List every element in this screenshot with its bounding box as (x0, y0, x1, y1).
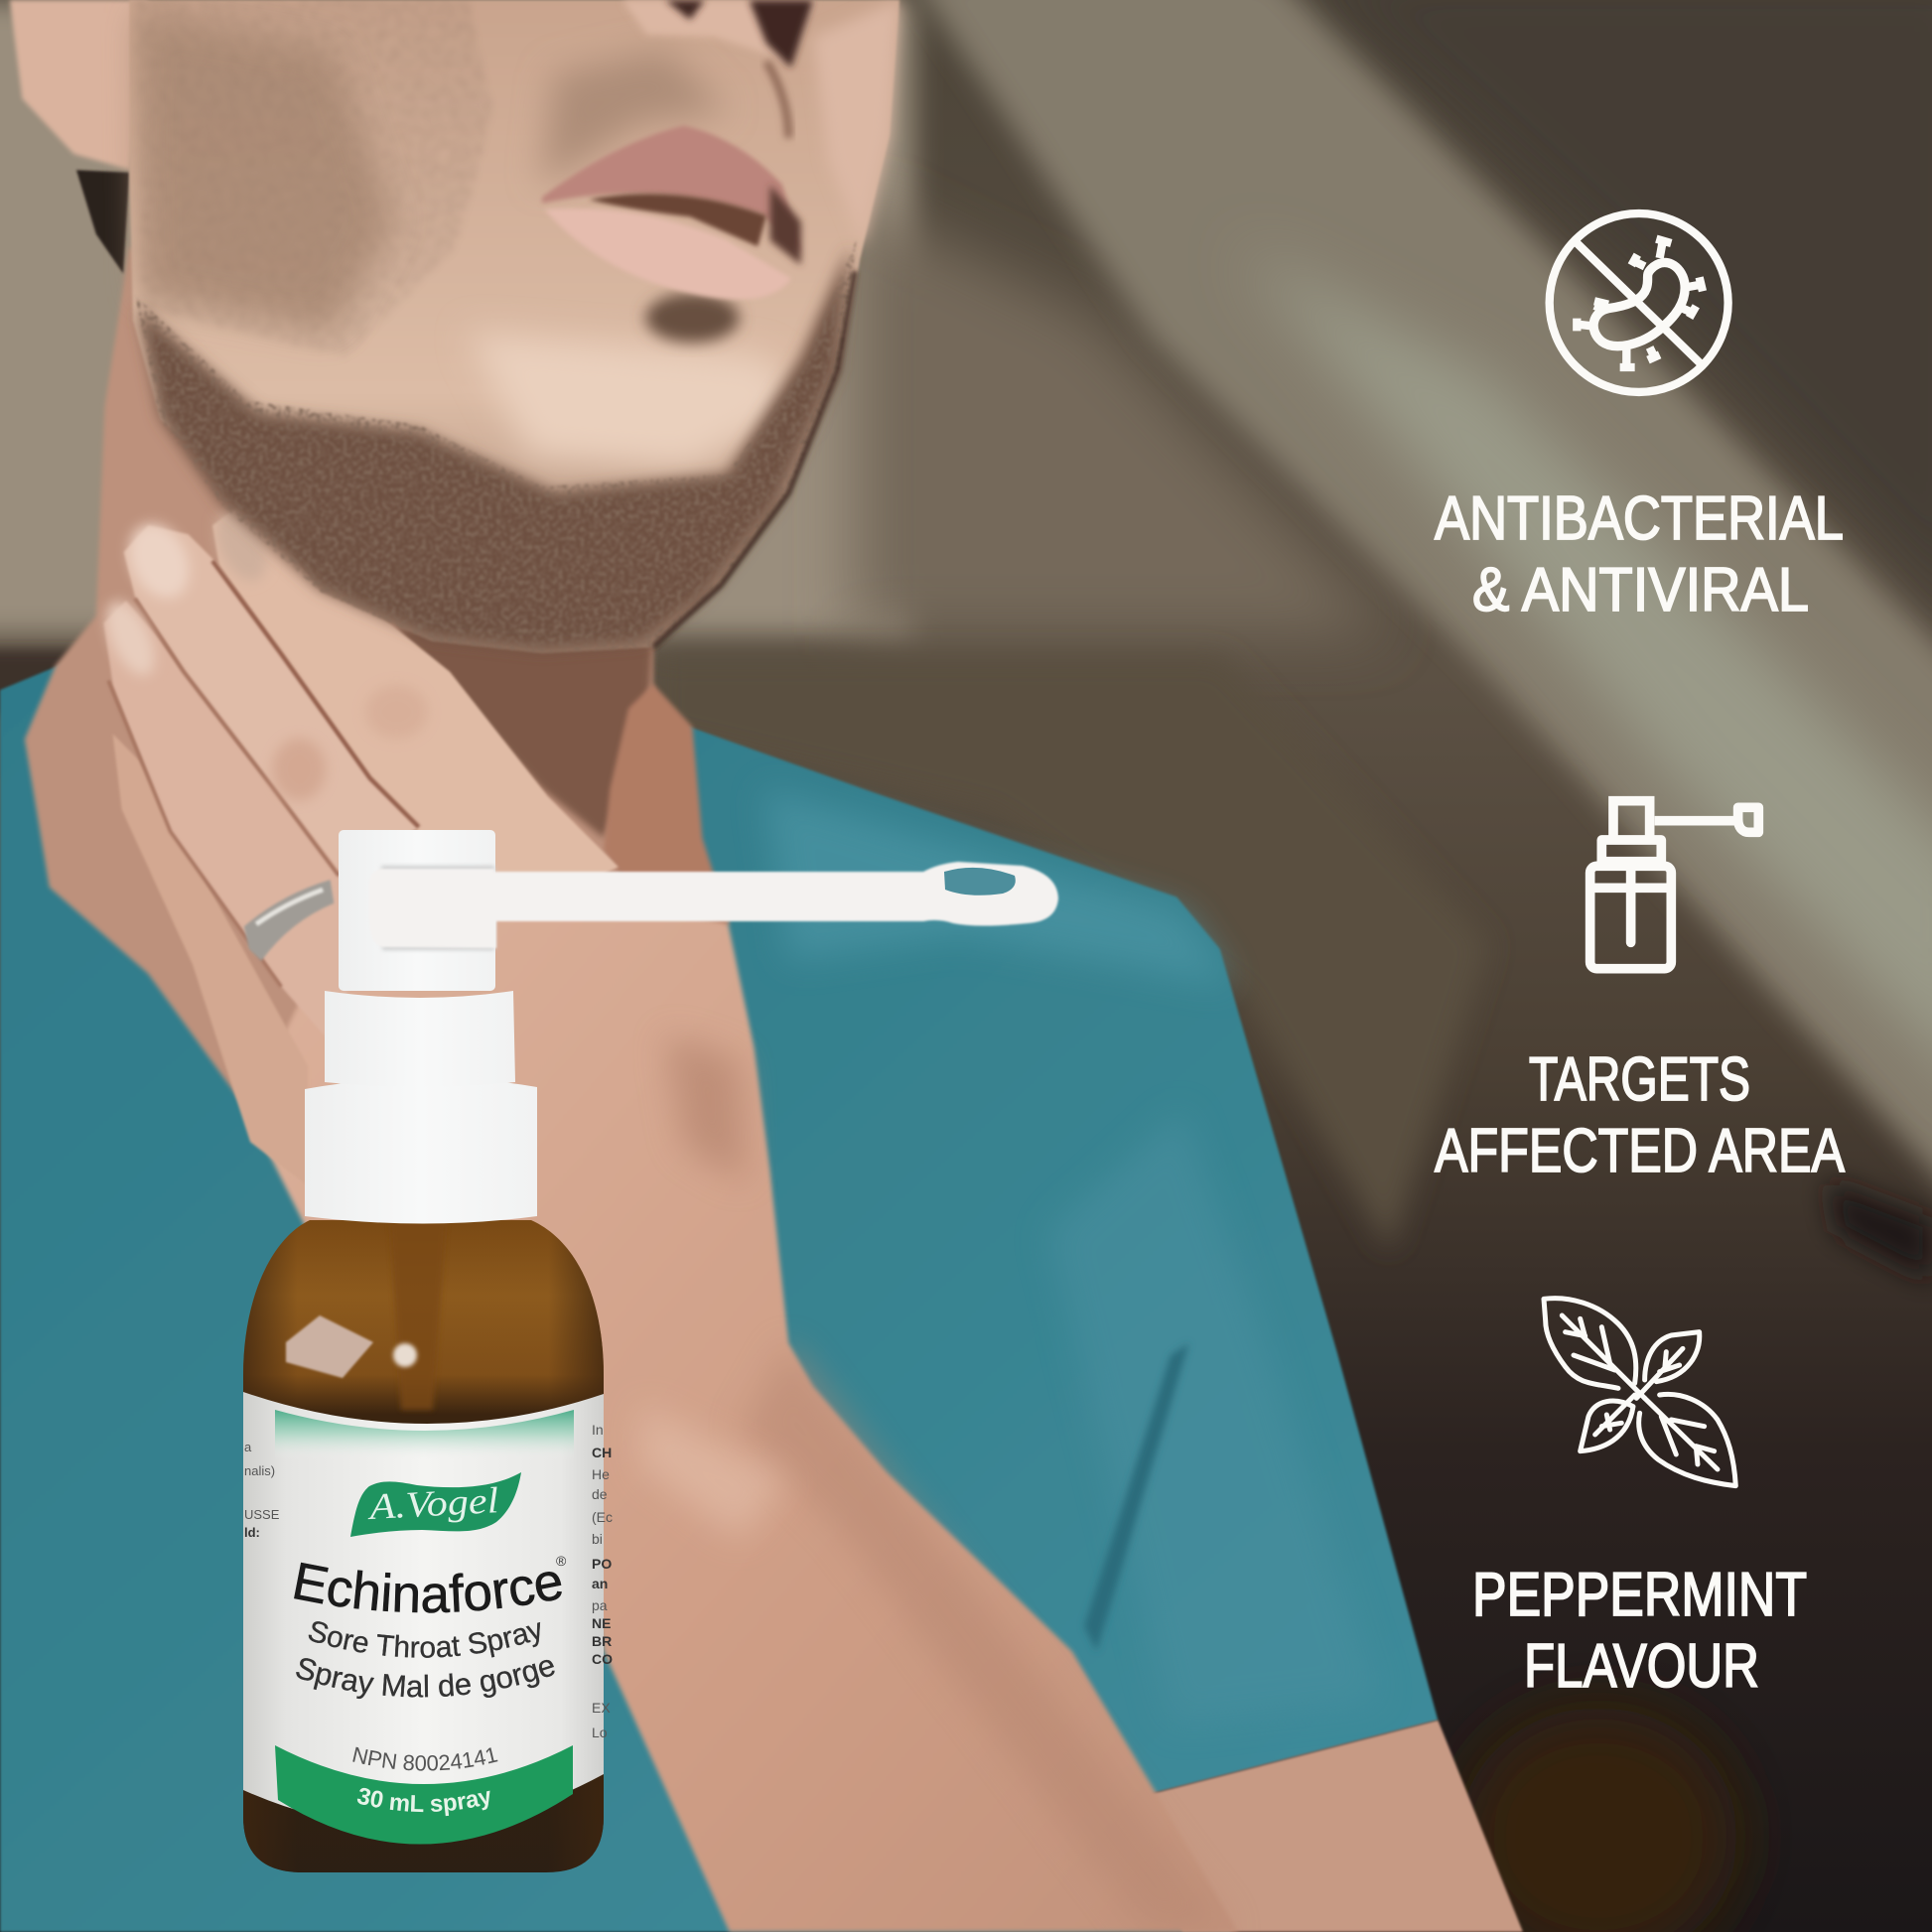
nose shadow line (766, 62, 788, 138)
pump cap middle collar (325, 991, 515, 1087)
lower lip (545, 208, 791, 300)
heading: peppermint flavour: FLAVOUR (1524, 1632, 1759, 1701)
beard on jaw (138, 246, 850, 650)
label side text right: (Ec (592, 1509, 613, 1525)
far cheek (813, 0, 899, 246)
soul patch (645, 293, 740, 343)
logo: A.Vogel leaf: A.Vogel (365, 1480, 499, 1528)
hand and forearm (96, 502, 1238, 1932)
stubble cheek texture (138, 2, 490, 353)
background: darker wall below beam (655, 655, 1489, 1251)
background: wall right of face (854, 199, 1390, 635)
label side text right: EX (592, 1700, 611, 1716)
label side text right: an (592, 1576, 608, 1591)
thumb (604, 684, 730, 924)
jawline dark edge (653, 271, 855, 647)
nozzle hole (944, 868, 1016, 896)
hair behind ear (76, 170, 129, 274)
nose (622, 0, 816, 62)
label side text left: a (244, 1440, 252, 1454)
pump cap lower collar (305, 1077, 537, 1223)
background: black corner patch (1827, 1181, 1932, 1281)
fingers in crop coordinates (96, 502, 619, 1186)
label side text right: Lo (592, 1725, 608, 1740)
dip tube (395, 1256, 441, 1412)
subtitle English: Sore Throat Spray (308, 1621, 540, 1658)
spray nozzle arm (369, 862, 1058, 948)
mouth corner shadow (770, 185, 801, 265)
label side text right: pa (592, 1597, 608, 1613)
NPN number: NPN 80024141 (352, 1747, 498, 1771)
upper lip (542, 126, 801, 252)
face (123, 0, 899, 659)
background: wall dark band left (0, 650, 119, 715)
neck shadow (394, 628, 653, 838)
label side text right: In (592, 1422, 604, 1438)
label side text right: BR (592, 1633, 612, 1649)
glass glare dot (393, 1343, 417, 1367)
label side text left (244, 1440, 280, 1540)
icon: no bacteria (1550, 213, 1728, 392)
label side text left: nalis) (244, 1463, 275, 1478)
index finger (212, 507, 619, 920)
person photo (0, 0, 1523, 1932)
hand tendon shading (665, 1035, 746, 1182)
label green fade strip (275, 1410, 574, 1459)
nostrils (665, 0, 813, 68)
heading: peppermint flavour (1472, 1561, 1807, 1701)
background: diagonal light beam (908, 0, 1932, 1231)
glass highlight (286, 1315, 373, 1378)
light chin patch (469, 333, 801, 469)
label side text left: ld: (244, 1525, 260, 1540)
label side text left: USSE (244, 1507, 280, 1522)
background: bright beam highlight (1241, 248, 1932, 1102)
background: top right dark beam (1281, 0, 1932, 655)
label side text right: CO (592, 1651, 613, 1667)
registered mark: ® (556, 1553, 567, 1569)
product bottle (243, 830, 1060, 1872)
stubble upper cheek (138, 12, 394, 333)
background: warm glow bottom (1459, 1708, 1737, 1932)
fingernails (118, 514, 201, 608)
beard texture (123, 234, 875, 659)
label side text right: de (592, 1486, 608, 1502)
label side text right: bi (592, 1531, 603, 1547)
heading: targets affected area: TARGETS (1529, 1045, 1750, 1114)
shirt shading folds (763, 788, 1232, 986)
nozzle head shadow (381, 866, 494, 950)
mouth opening (589, 194, 766, 246)
heading: targets affected area (1435, 1045, 1846, 1185)
ear (10, 0, 148, 170)
ring finger (104, 601, 347, 1062)
heading: antibacterial and antiviral: ANTIBACTERIAL (1435, 484, 1844, 553)
label side text right: CH (592, 1445, 612, 1460)
bottle label (243, 1392, 613, 1845)
label side text right: PO (592, 1556, 612, 1572)
wedding ring (244, 880, 334, 961)
icon: spray bottle (1590, 801, 1758, 969)
subtitle French: Spray Mal de gorge (296, 1658, 555, 1700)
green volume band (275, 1745, 573, 1845)
icon: peppermint leaves (1544, 1299, 1735, 1486)
volume text: 30 mL spray (357, 1787, 490, 1817)
finger far (113, 734, 308, 1186)
shirt (0, 659, 1438, 1932)
heading: targets affected area: AFFECTED AREA (1435, 1117, 1846, 1185)
neck (25, 246, 653, 1109)
pump cap top (339, 830, 495, 991)
logo: A.Vogel leaf (350, 1472, 521, 1537)
label side text right (592, 1422, 613, 1740)
label side text right: NE (592, 1615, 611, 1631)
moustache shadow (542, 50, 727, 185)
heading: peppermint flavour: PEPPERMINT (1472, 1561, 1807, 1629)
knuckle (365, 685, 428, 739)
middle finger (124, 525, 419, 876)
heading: antibacterial and antiviral: & ANTIVIRAL (1472, 556, 1809, 624)
amber glass (238, 1216, 608, 1876)
finger gaps (212, 561, 419, 827)
upper arm skin (1084, 1721, 1523, 1932)
label side text right: He (592, 1466, 610, 1482)
heading: antibacterial and antiviral (1435, 484, 1844, 624)
background: upper left wall (0, 0, 913, 635)
product name: Echinaforce (294, 1563, 562, 1613)
